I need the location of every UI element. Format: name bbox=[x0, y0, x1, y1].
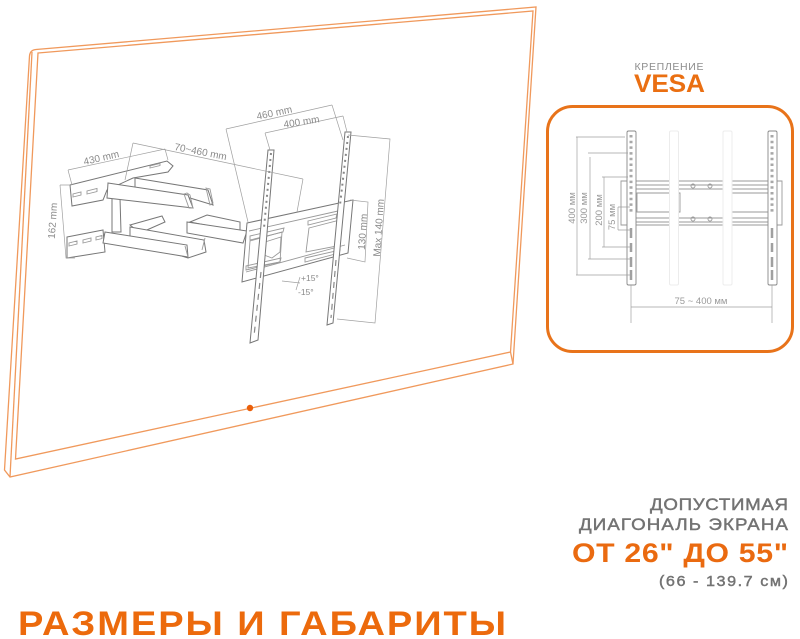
vesa heading: VESA bbox=[634, 71, 705, 98]
dimension: 75 ~ 400 мм bbox=[631, 285, 772, 323]
screen diagonal info: ДИАГОНАЛЬ ЭКРАНА bbox=[579, 515, 788, 534]
tv screen frame bbox=[4, 7, 536, 477]
right vesa rail bbox=[768, 131, 777, 285]
dimension: 400 мм bbox=[567, 137, 630, 275]
screen diagonal info: ДОПУСТИМАЯ bbox=[650, 495, 788, 514]
icon: orange centre dot bbox=[247, 405, 253, 411]
tilt angle marks bbox=[282, 273, 319, 297]
left vertical rail bbox=[250, 150, 274, 343]
tilt angle marks: +15° bbox=[301, 273, 319, 283]
right vertical rail bbox=[327, 132, 351, 325]
screen diagonal info bbox=[572, 495, 788, 590]
dimension: 300 мм bbox=[579, 153, 630, 259]
dimension: 75 ~ 400 мм: 75 ~ 400 мм bbox=[675, 296, 727, 307]
dimension: 70~460 mm bbox=[125, 142, 303, 212]
dimension: 130 mm bbox=[347, 200, 370, 262]
dimension: 400 мм: 400 мм bbox=[567, 192, 578, 224]
wall mount drawing bbox=[47, 104, 390, 343]
dimension: 400 mm: 400 mm bbox=[283, 114, 320, 131]
tilt angle marks: -15° bbox=[298, 287, 314, 297]
dimension: Max 140 mm bbox=[337, 135, 390, 323]
dimension: 162 mm bbox=[47, 185, 75, 258]
dimension: 200 мм: 200 мм bbox=[594, 194, 605, 226]
dimension: 130 mm: 130 mm bbox=[357, 213, 370, 250]
dimension: 75 мм: 75 мм bbox=[607, 204, 618, 230]
swing arms bbox=[103, 178, 247, 258]
dimension: 300 мм: 300 мм bbox=[579, 192, 590, 224]
left vesa rail bbox=[627, 131, 636, 285]
dimension: 200 мм bbox=[594, 177, 630, 247]
vesa heading: КРЕПЛЕНИЕ bbox=[634, 61, 704, 73]
vesa mounting plate bbox=[621, 181, 782, 225]
dimension: 70~460 mm: 70~460 mm bbox=[173, 142, 228, 163]
dimension: 162 mm: 162 mm bbox=[47, 202, 60, 239]
dimension: 460 mm: 460 mm bbox=[256, 104, 293, 123]
dimension: 400 mm bbox=[265, 114, 347, 150]
wall plate upper bbox=[70, 161, 173, 206]
screen diagonal info: (66 - 139.7 см) bbox=[659, 574, 788, 590]
wall plate lower bbox=[67, 216, 165, 258]
dimension: 430 mm: 430 mm bbox=[83, 149, 120, 168]
panel: vesa diagram bbox=[548, 106, 792, 352]
dimension: Max 140 mm: Max 140 mm bbox=[372, 199, 387, 257]
screen diagonal info: ОТ 26" ДО 55" bbox=[572, 538, 788, 569]
faded rails bbox=[670, 131, 732, 285]
dimension: 460 mm bbox=[226, 104, 343, 222]
dimension: 430 mm bbox=[68, 149, 168, 185]
dimension: 75 мм bbox=[607, 204, 630, 230]
tv plate bbox=[242, 200, 353, 282]
